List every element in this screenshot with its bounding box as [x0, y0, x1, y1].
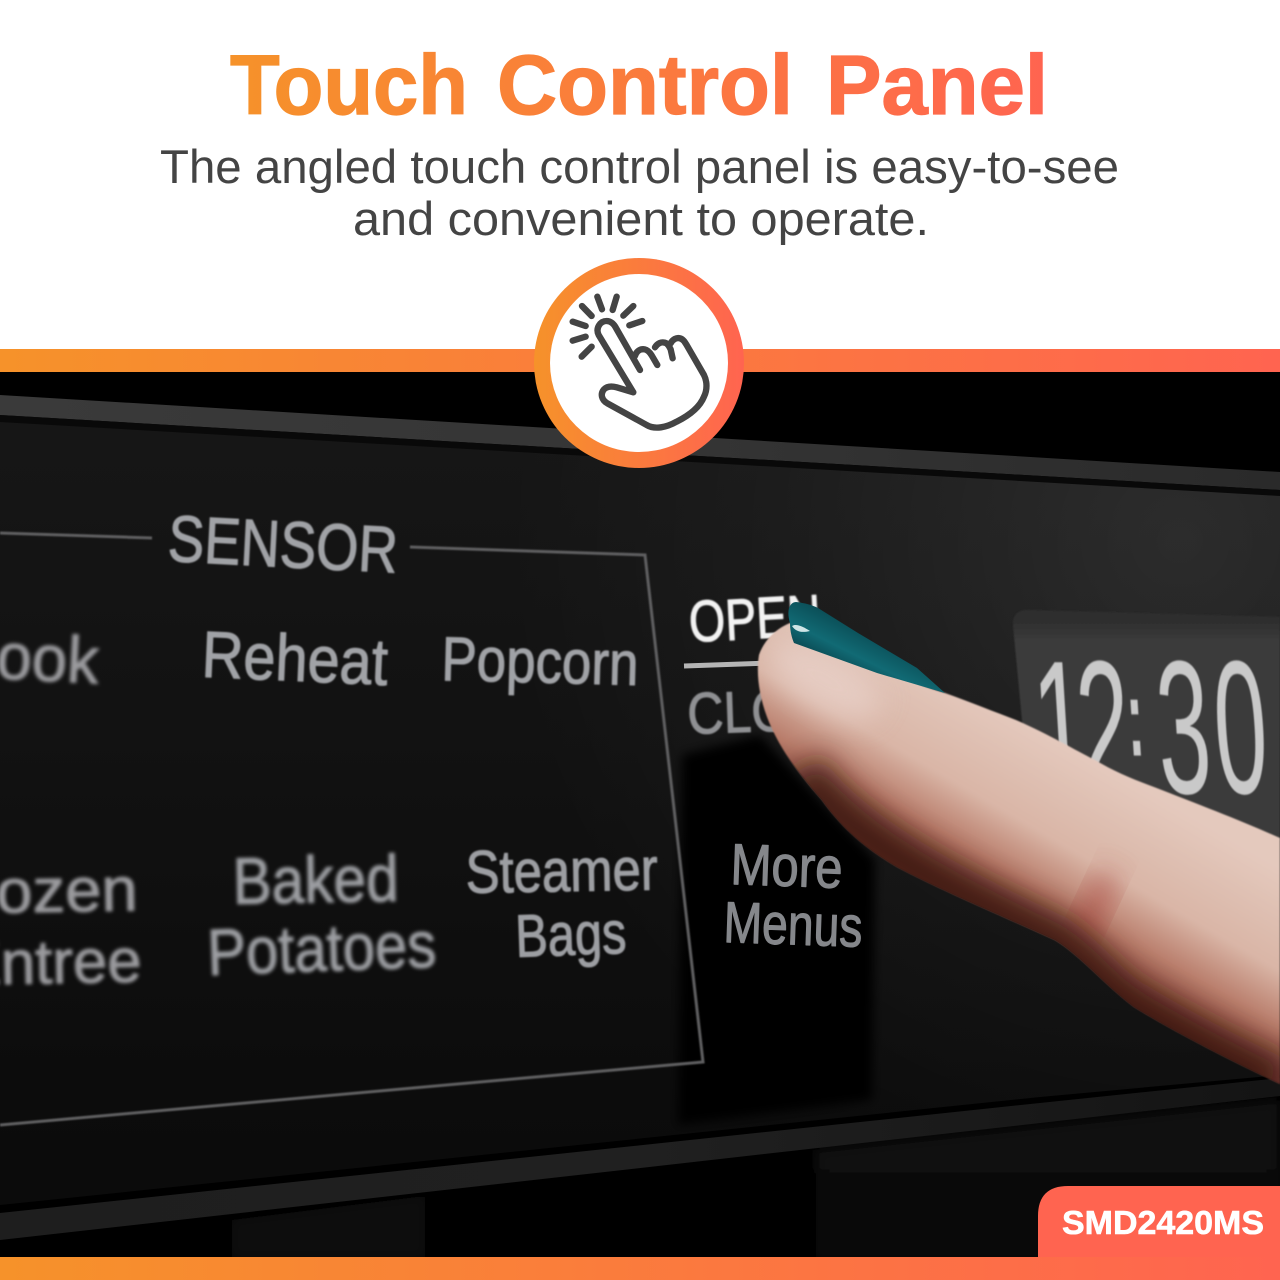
clock display window [1013, 610, 1280, 840]
finger crease [1068, 865, 1122, 945]
label: Baked: Baked [232, 841, 399, 918]
label: More: More [730, 832, 844, 901]
lower-edge shadow [800, 770, 1280, 1084]
clock digits: 1 [1027, 621, 1093, 833]
title: Panel [826, 38, 1048, 132]
bottom gradient bar [0, 1257, 1280, 1280]
shadow strip beneath finger [678, 735, 875, 1125]
label: CLOSE: CLOSE [686, 676, 858, 747]
label: Potatoes: Potatoes [206, 907, 437, 989]
label: Reheat: Reheat [200, 617, 389, 699]
nail highlight [792, 625, 810, 632]
finger tip highlight [758, 640, 878, 726]
top gradient bar [0, 349, 1280, 372]
finger [757, 602, 1280, 1084]
clock digits: 3 [1150, 621, 1216, 833]
icon: touch hand badge [534, 258, 744, 468]
under-panel lighter patch right [816, 1100, 1280, 1257]
panel top bezel [0, 395, 1280, 490]
clock digits: 2 [1070, 621, 1136, 833]
label: Steamer: Steamer [465, 836, 658, 906]
title [230, 38, 1048, 132]
label: OPEN: OPEN [687, 583, 822, 655]
label: Popcorn: Popcorn [441, 625, 639, 699]
divider between OPEN and CLOSE [684, 663, 770, 666]
subtitle [160, 140, 1119, 245]
subtitle: The angled touch control panel is easy-to-see [160, 140, 1119, 193]
finger body [758, 623, 1280, 1084]
title: Control [497, 38, 793, 132]
label: Bags: Bags [514, 899, 627, 970]
label: Menus: Menus [723, 890, 864, 960]
model number: SMD2420MS [1062, 1204, 1264, 1241]
product photo: oven control panel [0, 372, 1280, 1258]
panel glow [0, 415, 1280, 1205]
subtitle: and convenient to operate. [353, 192, 929, 245]
teal fingernail [788, 602, 945, 693]
panel lower lip [0, 1078, 1280, 1240]
title: Touch [230, 38, 468, 132]
panel surface [0, 415, 1280, 1205]
clock digits: : [1125, 667, 1145, 774]
bezel shadow [0, 415, 1280, 496]
clock digits: 0 [1207, 621, 1273, 833]
finger shading and highlights [757, 625, 1280, 1084]
white header background [0, 0, 1280, 372]
icon: pointing hand [573, 297, 706, 428]
under-panel lighter patch left [232, 1196, 425, 1257]
model badge [1038, 1186, 1280, 1257]
label: SENSOR: SENSOR [166, 501, 400, 587]
sensor group frame [0, 533, 703, 1125]
